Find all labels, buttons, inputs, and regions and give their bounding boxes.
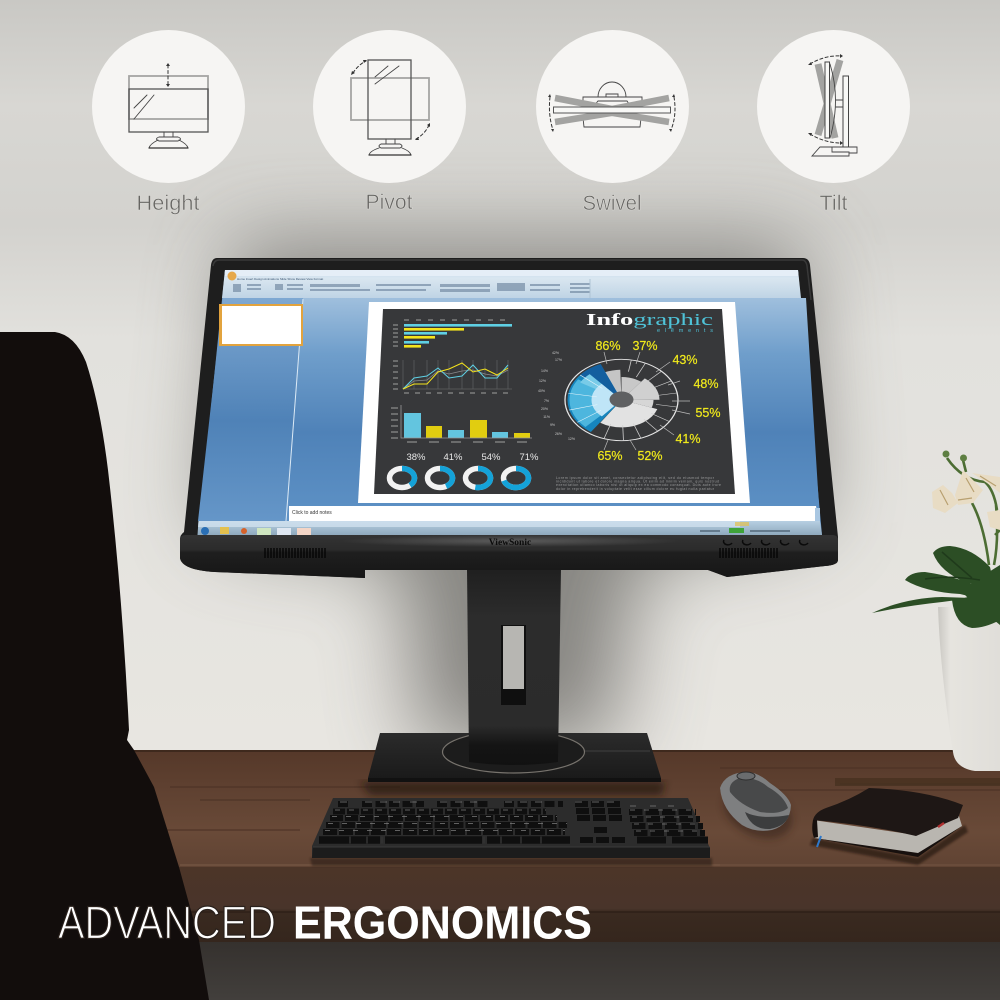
donut labels: 38%: [406, 452, 426, 463]
radial small labels: 9%: [550, 423, 555, 427]
monitor: [180, 258, 838, 578]
scrollbar: [815, 508, 820, 522]
orchid leaves: [872, 546, 1000, 628]
mouse body: [720, 772, 791, 831]
keys: [319, 804, 708, 844]
radial small labels: 42%: [552, 351, 559, 355]
radial small labels: 12%: [539, 379, 546, 383]
radial percentage labels: 37%: [632, 339, 658, 353]
icon: tilt: [757, 30, 910, 183]
office ribbon: Home Insert Design Animations Slide Show Review View Format: [237, 277, 323, 281]
notebook pages: [813, 816, 962, 855]
donut charts: [390, 468, 528, 488]
taskbar: [198, 521, 822, 535]
radial small labels: 20%: [541, 407, 548, 411]
radial percentage labels: 52%: [637, 449, 663, 463]
keyboard: [310, 798, 712, 866]
speaker vents left: [265, 548, 325, 558]
pot: [938, 607, 1000, 771]
headline: [58, 896, 592, 948]
radial percentage labels: 65%: [597, 449, 623, 463]
stand base: [368, 733, 661, 781]
headline: light part: ADVANCED: [58, 896, 276, 948]
slide: [358, 302, 750, 503]
speaker vents right: [720, 548, 777, 558]
slide paper: [358, 302, 750, 503]
notes pane: Click to add notes: [292, 510, 332, 516]
lorem ipsum block: exercitation ullamco laboris nisi ut aliquip ex ea commodo consequat. Duis aute irure: [556, 483, 721, 487]
stand shadow: [360, 782, 665, 795]
chair back: [0, 332, 209, 1000]
donut labels: 41%: [443, 452, 463, 463]
radial percentage labels: 43%: [672, 353, 698, 367]
desk surface: [0, 750, 1000, 1000]
label: swivel: Swivel: [582, 192, 642, 215]
label: pivot: Pivot: [366, 191, 413, 214]
radial percentage labels: 41%: [675, 432, 701, 446]
monitor chin: [180, 535, 838, 578]
radial small labels: 40%: [538, 389, 545, 393]
column chart: [391, 405, 532, 442]
screen background: [198, 270, 822, 535]
infographic subtitle: elements: [657, 328, 716, 334]
keyboard body: [312, 798, 709, 858]
donut labels: [406, 452, 539, 463]
infographic title: Info graphic: [586, 310, 713, 329]
notebook: [810, 788, 968, 865]
plant and pot: [872, 451, 1000, 771]
radial percentage labels: 55%: [695, 406, 721, 420]
donut labels: 54%: [481, 452, 501, 463]
lorem ipsum block: dolor in reprehenderit in voluptate velit esse cillum dolore eu fugiat nulla pariatur: [556, 487, 715, 491]
office ribbon: [222, 270, 801, 298]
icon row: adjustment features: [92, 30, 910, 215]
radial small labels: [538, 351, 575, 441]
radial small labels: 12%: [568, 437, 575, 441]
icon: swivel: [536, 30, 689, 183]
notes pane: [289, 506, 819, 521]
lorem ipsum block: incididunt ut labore et dolore magna aliqua. Ut enim ad minim veniam, quis nostrud: [556, 480, 719, 484]
monitor shadow on wall: [210, 245, 820, 750]
right workspace: [289, 298, 820, 522]
orchid buds: [942, 451, 967, 462]
radial small labels: 14%: [541, 369, 548, 373]
bookmark ribbon: [817, 836, 821, 847]
radial percentage labels: [595, 339, 721, 463]
donut labels: 71%: [519, 452, 539, 463]
radial small labels: 7%: [544, 399, 549, 403]
keyboard shadow: [310, 858, 712, 866]
key legends: [325, 802, 705, 831]
monitor stand: [360, 568, 665, 795]
neck cable slot: [501, 625, 526, 705]
label: height: Height: [136, 192, 200, 215]
notebook clasp: [938, 823, 944, 827]
notebook shadow: [810, 825, 968, 865]
brand: ViewSonic: [489, 538, 531, 548]
monitor frame: [180, 258, 838, 578]
stand neck: [467, 568, 561, 765]
icon: pivot: [313, 30, 466, 183]
radial small labels: 17%: [555, 358, 562, 362]
orchid stems: [947, 458, 1000, 565]
lorem ipsum block: [556, 476, 721, 491]
chin center highlight: [340, 535, 680, 547]
lorem ipsum block: Lorem ipsum dolor sit amet, consectetur adipiscing elit, sed do eiusmod tempor: [556, 476, 715, 480]
monitor buttons: [724, 540, 808, 545]
radial small labels: 26%: [555, 432, 562, 436]
headline: bold part: ERGONOMICS: [293, 896, 592, 948]
slide dark panel: [374, 309, 735, 494]
slide thumbnail panel: [198, 298, 303, 521]
orchid flowers: [932, 470, 1000, 530]
radial percentage labels: 86%: [595, 339, 621, 353]
radial small labels: 11%: [543, 415, 550, 419]
label: tilt: Tilt: [820, 192, 848, 215]
horizontal bar chart: [393, 320, 512, 348]
notebook cover: [813, 788, 963, 836]
mouse: [715, 772, 801, 849]
background: wall: [0, 0, 1000, 752]
radial percentage labels: 48%: [693, 377, 719, 391]
line chart: [393, 360, 512, 393]
mouse shadow: [715, 775, 801, 849]
icon: height: [92, 30, 245, 183]
screen: [198, 270, 822, 535]
radial chart: [565, 352, 690, 450]
